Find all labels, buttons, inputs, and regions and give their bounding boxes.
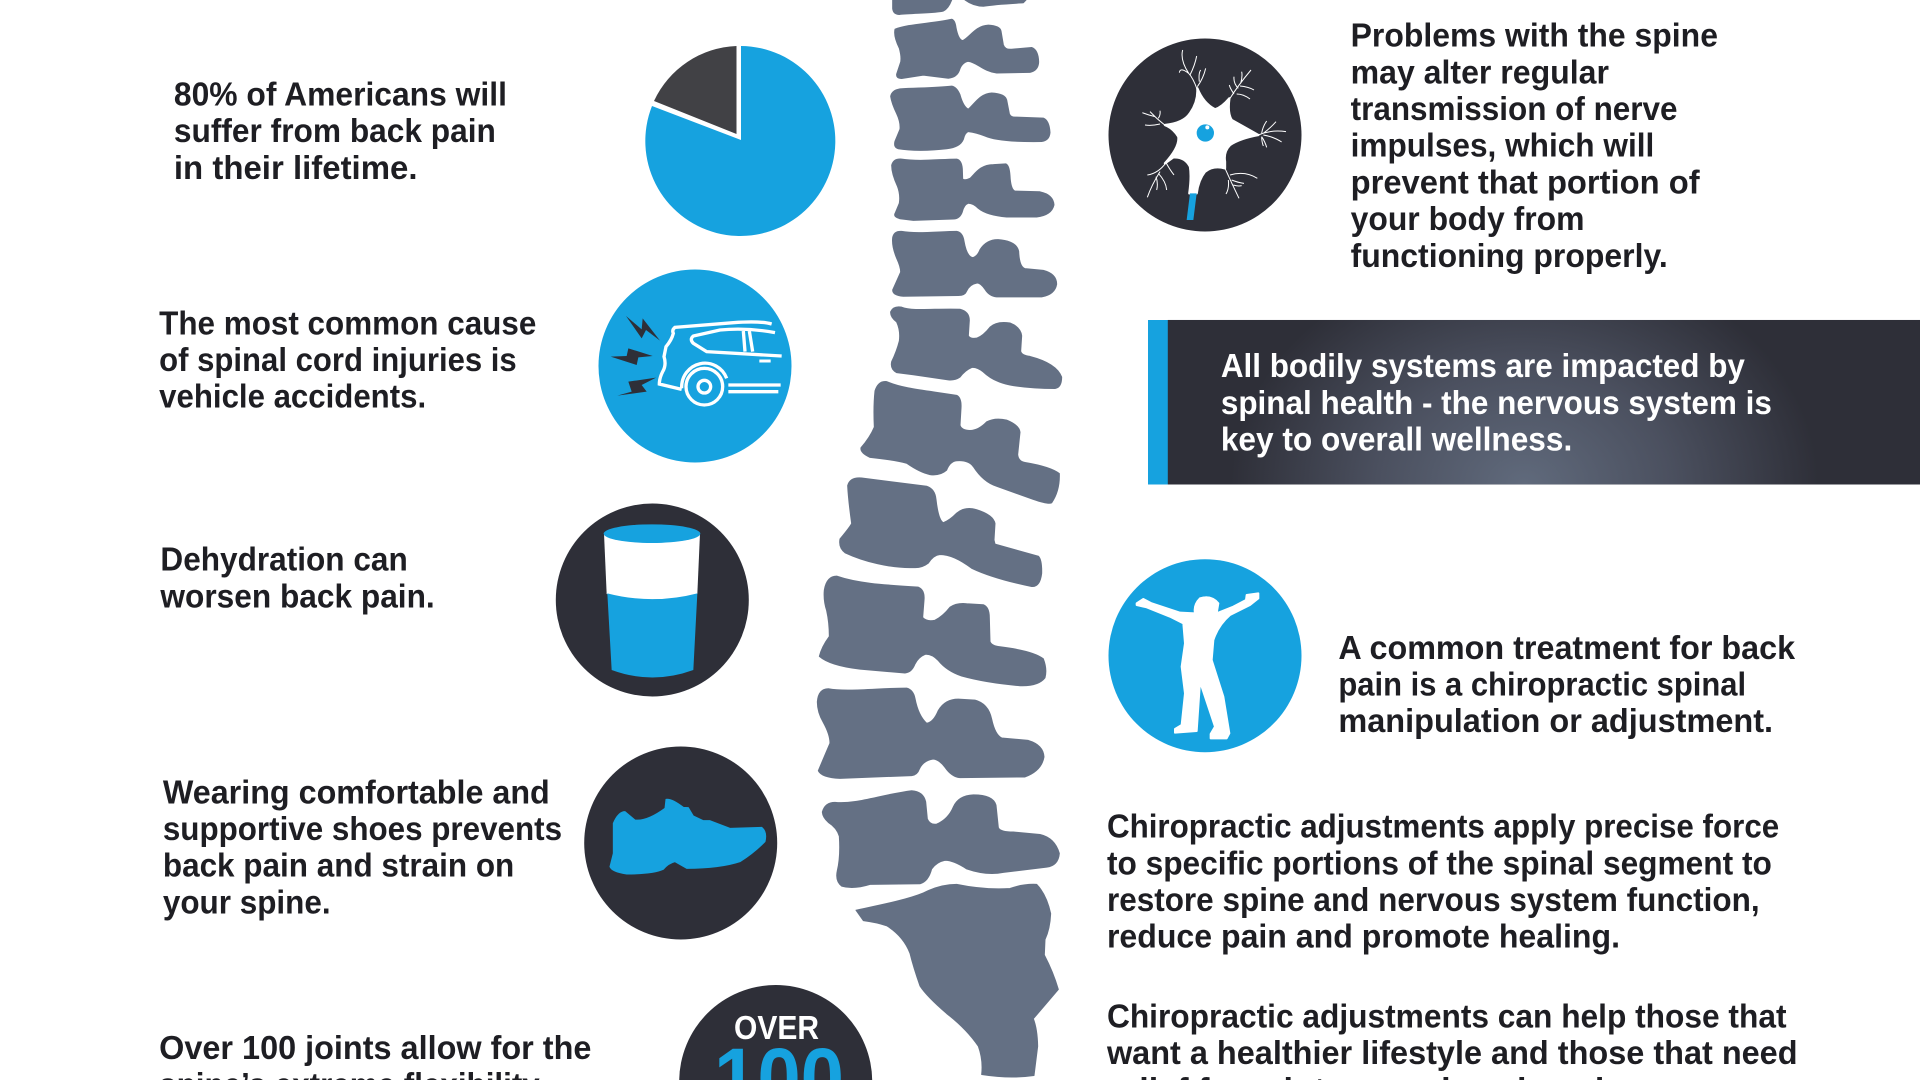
text: 80 percent fact: in their lifetime. xyxy=(174,150,418,187)
text: chiropractic adjustments explained: restore spine and nervous system function, xyxy=(1107,882,1760,919)
text: who adjustments help: want a healthier lifestyle and those that need xyxy=(1106,1035,1798,1072)
icon: pie chart 80 percent xyxy=(645,46,835,236)
icon: person with raised arms xyxy=(1108,559,1302,752)
text: who adjustments help: Chiropractic adjustments can help those that xyxy=(1107,998,1787,1035)
text: common treatment: pain is a chiropractic spinal xyxy=(1338,667,1746,704)
text: dehydration fact: worsen back pain. xyxy=(159,578,435,615)
text: banner message: spinal health - the nervous system is xyxy=(1221,385,1772,422)
text: nerve impulses: functioning properly. xyxy=(1351,238,1668,275)
text: banner message: key to overall wellness. xyxy=(1221,422,1572,459)
lower vertebrae and sacrum xyxy=(817,576,1059,1077)
text: 80 percent fact: suffer from back pain xyxy=(174,113,496,150)
icon: shoe xyxy=(584,746,777,940)
text: shoes fact: supportive shoes prevents xyxy=(163,811,562,848)
text: chiropractic adjustments explained: reduce pain and promote healing. xyxy=(1107,919,1620,956)
text: nerve impulses: Problems with the spine xyxy=(1351,18,1718,55)
icon: neuron xyxy=(1108,38,1302,232)
text: vehicle accidents fact xyxy=(159,305,536,416)
text: chiropractic adjustments explained xyxy=(1107,809,1779,956)
panel: banner callout xyxy=(1148,320,1920,484)
text: dehydration fact xyxy=(159,542,435,615)
text: vehicle accidents fact: of spinal cord injuries is xyxy=(159,342,517,379)
upper vertebrae xyxy=(840,0,1062,587)
text: shoes fact: Wearing comfortable and xyxy=(163,774,550,811)
spine illustration xyxy=(817,0,1062,1077)
icon: car accident xyxy=(598,270,792,462)
text: who adjustments help xyxy=(1106,998,1798,1080)
text: shoes fact: back pain and strain on xyxy=(163,848,514,885)
text: common treatment: manipulation or adjustment. xyxy=(1338,703,1773,740)
text: shoes fact xyxy=(163,774,562,921)
icon: glass of water xyxy=(556,504,749,696)
text: nerve impulses: your body from xyxy=(1351,201,1584,238)
text: nerve impulses xyxy=(1351,18,1718,275)
text: vehicle accidents fact: vehicle accidents. xyxy=(159,379,426,416)
text: chiropractic adjustments explained: Chiropractic adjustments apply precise force xyxy=(1107,809,1779,846)
icon: over 100 badge xyxy=(679,985,872,1080)
text: dehydration fact: Dehydration can xyxy=(160,542,408,579)
text: nerve impulses: transmission of nerve xyxy=(1351,91,1678,128)
badge label: over: OVER xyxy=(734,1009,819,1046)
text: common treatment xyxy=(1338,630,1796,740)
text: 80 percent fact xyxy=(174,76,507,187)
text: nerve impulses: impulses, which will xyxy=(1351,128,1654,165)
text: nerve impulses: may alter regular xyxy=(1351,54,1609,91)
text: vehicle accidents fact: The most common cause xyxy=(159,305,536,342)
text: common treatment: A common treatment for back xyxy=(1338,630,1796,667)
text: chiropractic adjustments explained: to specific portions of the spinal segment to xyxy=(1107,845,1772,882)
text: joints fact: Over 100 joints allow for the xyxy=(159,1030,591,1067)
text: shoes fact: your spine. xyxy=(163,884,331,921)
text: nerve impulses: prevent that portion of xyxy=(1351,164,1701,201)
text: banner message: All bodily systems are impacted by xyxy=(1221,348,1745,385)
text: banner message xyxy=(1221,348,1772,459)
text: 80 percent fact: 80% of Americans will xyxy=(174,76,507,113)
